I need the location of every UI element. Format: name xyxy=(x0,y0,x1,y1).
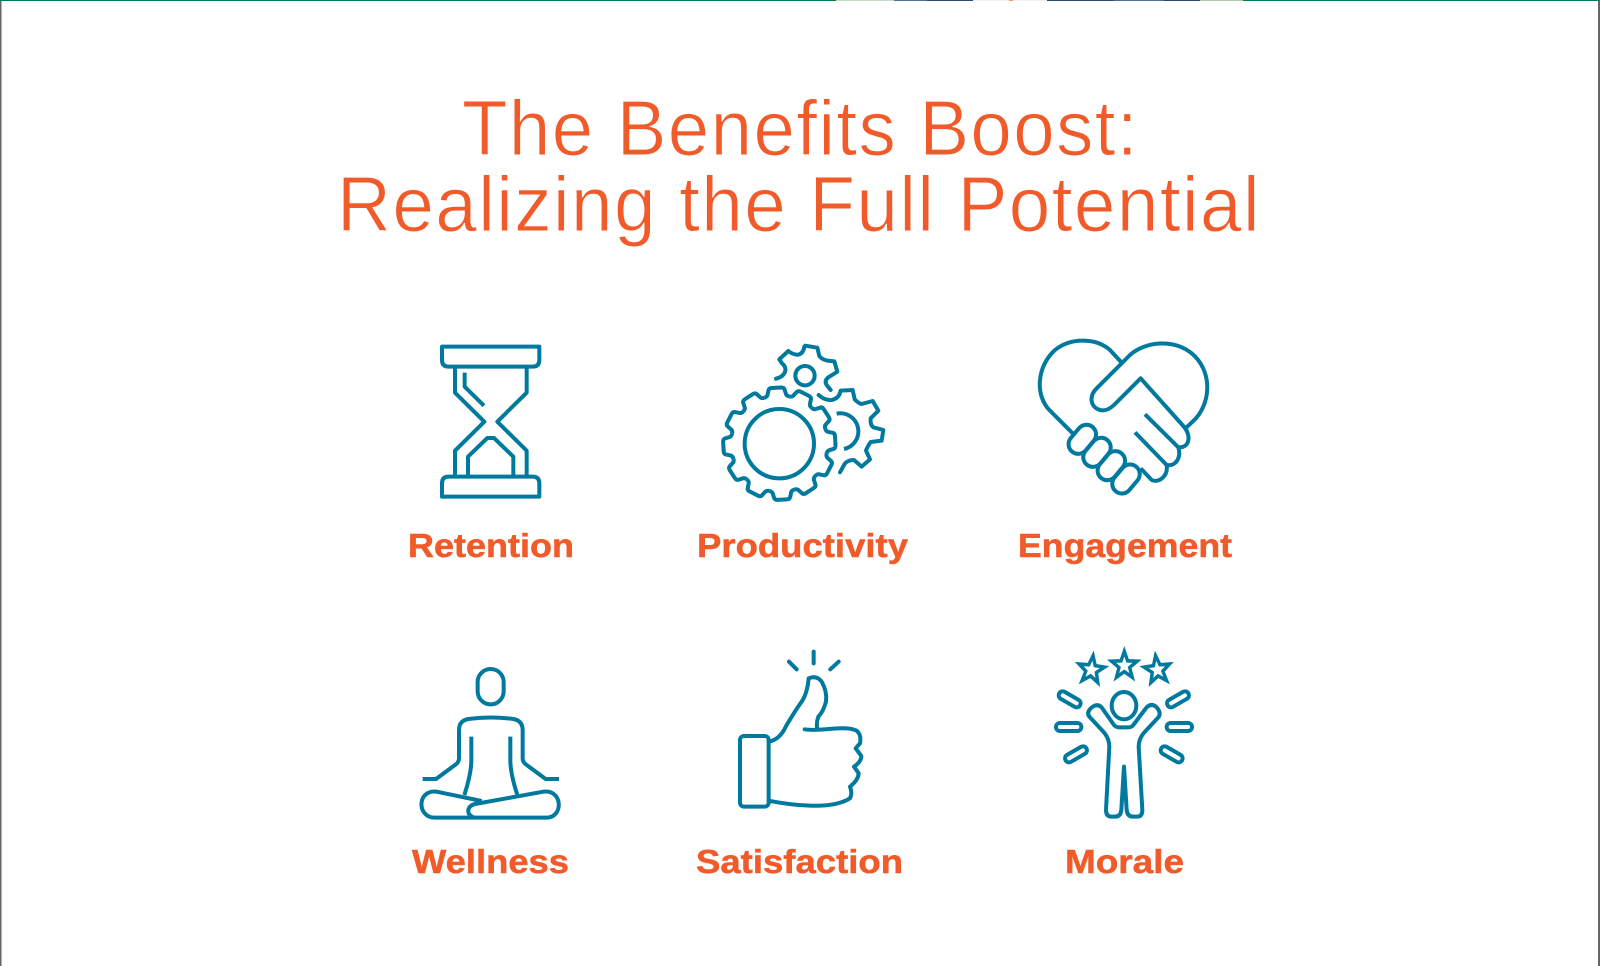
title: The Benefits Boost: xyxy=(462,84,1139,172)
icon: gears (productivity) xyxy=(723,346,883,500)
label: Satisfaction: Satisfaction xyxy=(696,843,903,880)
title xyxy=(337,84,1261,248)
icon: thumbs up (satisfaction) xyxy=(740,652,861,807)
label: Engagement: Engagement xyxy=(1018,527,1232,564)
label: Productivity: Productivity xyxy=(697,527,909,564)
icon: cheering person with stars (morale) xyxy=(1056,651,1192,817)
icon: meditating person (wellness) xyxy=(421,669,559,818)
icon: hourglass (retention) xyxy=(442,347,539,497)
icon: heart handshake (engagement) xyxy=(1040,341,1207,497)
label: Morale: Morale xyxy=(1065,843,1184,880)
label: Wellness: Wellness xyxy=(412,843,569,880)
label: Retention: Retention xyxy=(408,527,574,564)
title: Realizing the Full Potential xyxy=(337,160,1261,248)
